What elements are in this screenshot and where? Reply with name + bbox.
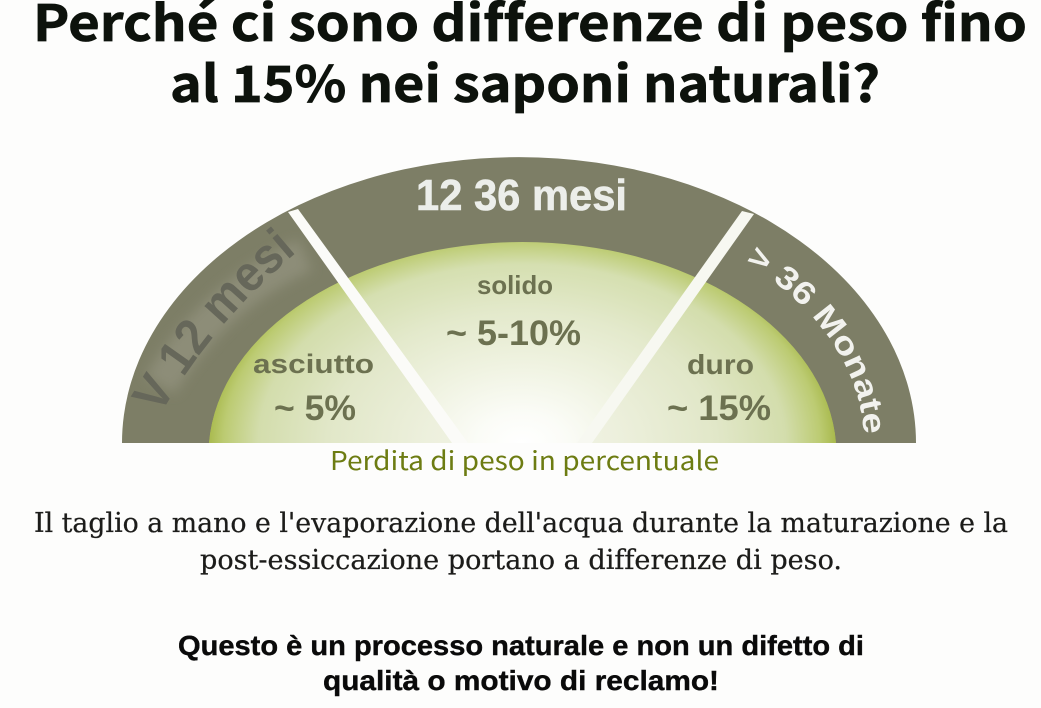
closing statement: Questo è un processo naturale e non un difetto di bbox=[178, 630, 864, 661]
side segments tint bbox=[209, 282, 836, 443]
closing statement bbox=[178, 630, 864, 696]
axis caption: Perdita di peso in percentuale bbox=[330, 441, 719, 478]
explanation text: post-essiccazione portano a differenze di peso. bbox=[200, 545, 842, 576]
gauge chart bbox=[122, 157, 916, 443]
segment: solido bbox=[446, 270, 581, 353]
segment: solido: solido bbox=[477, 270, 553, 300]
segment: duro bbox=[667, 349, 771, 428]
segment: duro: duro bbox=[687, 349, 754, 380]
segment: asciutto bbox=[253, 349, 374, 428]
label: over 36 months: > 36 Monate bbox=[748, 246, 881, 432]
outer band bbox=[122, 157, 916, 443]
inner green semi-ellipse bbox=[209, 242, 836, 443]
explanation text: Il taglio a mano e l'evaporazione dell'acqua durante la maturazione e la bbox=[34, 508, 1008, 539]
segment: duro: ~ 15% bbox=[667, 389, 771, 428]
segment: asciutto: asciutto bbox=[253, 349, 374, 379]
title bbox=[33, 0, 1027, 117]
segment: asciutto: ~ 5% bbox=[274, 389, 356, 428]
label: up to 12 months: V 12 mesi bbox=[131, 226, 294, 404]
label: 12-36 months: 12 36 mesi bbox=[416, 171, 627, 220]
explanation text bbox=[34, 508, 1008, 576]
separator left bbox=[288, 209, 468, 443]
title: al 15% nei saponi naturali? bbox=[170, 45, 880, 117]
segment: solido: ~ 5-10% bbox=[446, 314, 581, 353]
separator right bbox=[577, 211, 754, 443]
closing statement: qualità o motivo di reclamo! bbox=[323, 665, 719, 696]
lighter band: up to 12 months bbox=[160, 255, 305, 385]
